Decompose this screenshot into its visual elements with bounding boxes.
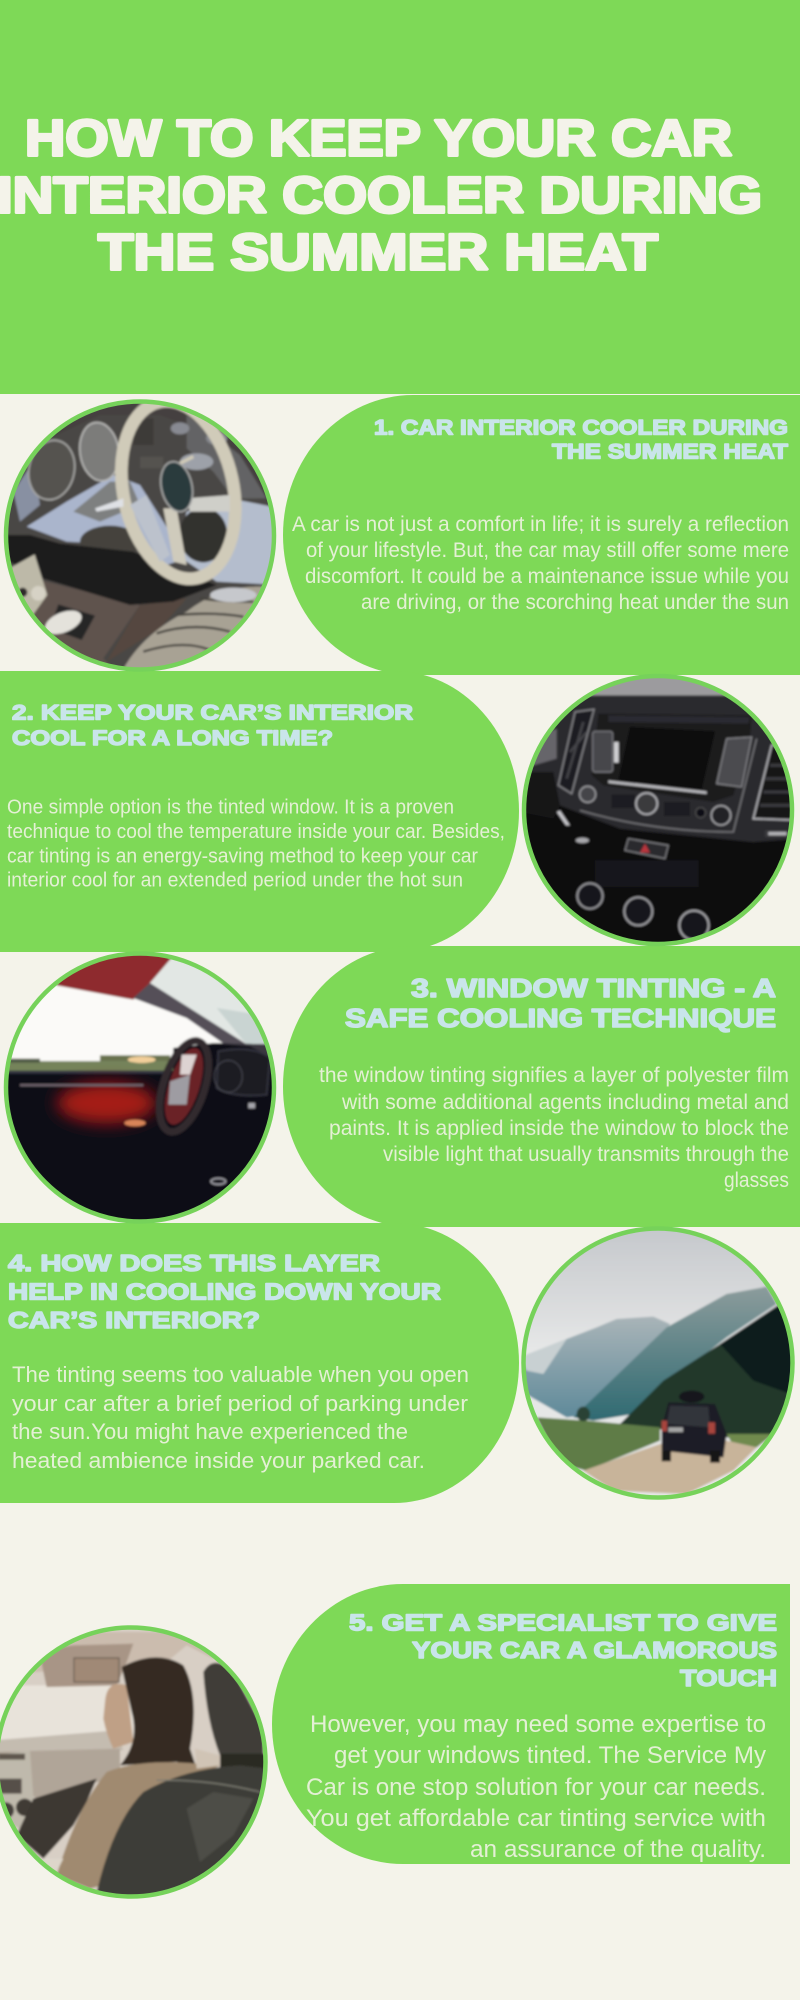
title (0, 110, 762, 280)
body text 3: with some additional agents including metal and (341, 1091, 789, 1114)
panel: section 4 (0, 1223, 519, 1503)
body text 1: of your lifestyle. But, the car may still offer some mere (306, 539, 789, 562)
body text 4: the sun.You might have experienced the (12, 1419, 408, 1444)
photo ring 4 (524, 1228, 792, 1498)
header band (0, 0, 800, 394)
panel: section 5 (272, 1584, 790, 1864)
title: THE SUMMER HEAT (98, 224, 658, 280)
heading 5: 5. GET A SPECIALIST TO GIVE (349, 1610, 777, 1636)
heading 3 (345, 975, 776, 1033)
heading 4 (8, 1250, 441, 1333)
body text 2: car tinting is an energy-saving method to keep your car (7, 846, 478, 868)
panel: section 3 (283, 946, 800, 1227)
title: INTERIOR COOLER DURING (0, 166, 762, 224)
body text 5 (306, 1711, 766, 1863)
body text 1: are driving, or the scorching heat under the sun (361, 591, 789, 614)
body text 4: The tinting seems too valuable when you open (12, 1362, 469, 1387)
heading 5: YOUR CAR A GLAMOROUS (412, 1637, 777, 1663)
photo ring 1 (6, 402, 274, 670)
body text 3: visible light that usually transmits through the (383, 1143, 789, 1166)
heading 2: COOL FOR A LONG TIME? (12, 726, 333, 750)
body text 4: your car after a brief period of parking under (12, 1391, 469, 1416)
heading 3: 3. WINDOW TINTING - A (411, 975, 776, 1003)
heading 5 (349, 1610, 777, 1691)
photo ring 2 (524, 676, 792, 944)
panel shape 1 (283, 395, 800, 675)
body text 3: glasses (724, 1169, 789, 1192)
panel shape 5 (272, 1584, 790, 1864)
body text 5: You get affordable car tinting service with (306, 1805, 766, 1832)
body text 2: interior cool for an extended period under the hot sun (7, 870, 463, 892)
body text 4: heated ambience inside your parked car. (12, 1448, 425, 1473)
body text 3 (319, 1064, 789, 1192)
body text 1 (292, 513, 789, 614)
body text 1: A car is not just a comfort in life; it is surely a reflection (292, 513, 789, 536)
heading 2 (12, 700, 414, 750)
photo 3: car interior at sunset (8, 956, 272, 1220)
body text 2 (7, 796, 505, 892)
heading 5: TOUCH (680, 1665, 777, 1691)
heading 4: CAR’S INTERIOR? (8, 1307, 260, 1333)
body text 4 (12, 1362, 469, 1473)
panel shape 4 (0, 1223, 519, 1503)
body text 5: get your windows tinted. The Service My (334, 1742, 766, 1769)
photo ring 5 (0, 1628, 266, 1896)
panel shape 2 (0, 671, 519, 952)
photo 5: woman smiling in passenger seat (0, 1630, 264, 1894)
heading 1: 1. CAR INTERIOR COOLER DURING (374, 416, 788, 440)
photo 1: classic car dashboard and steering wheel (8, 404, 272, 668)
body text 5: However, you may need some expertise to (310, 1711, 766, 1738)
photo ring 3 (6, 954, 274, 1222)
body text 2: One simple option is the tinted window. It is a proven (7, 796, 454, 818)
title: HOW TO KEEP YOUR CAR (25, 110, 732, 166)
heading 4: HELP IN COOLING DOWN YOUR (8, 1278, 441, 1304)
panel: section 1 (283, 395, 800, 675)
photo 4: SUV on mountain road (526, 1230, 790, 1495)
body text 5: an assurance of the quality. (470, 1836, 766, 1863)
body text 1: discomfort. It could be a maintenance issue while you (305, 565, 789, 588)
body text 3: paints. It is applied inside the window to block the (329, 1117, 789, 1140)
photo 2: car infotainment console (526, 678, 790, 942)
body text 2: technique to cool the temperature inside your car. Besides, (7, 821, 505, 843)
heading 2: 2. KEEP YOUR CAR’S INTERIOR (12, 700, 414, 724)
panel shape 3 (283, 946, 800, 1227)
panel: section 2 (0, 671, 519, 952)
body text 5: Car is one stop solution for your car needs. (306, 1774, 766, 1801)
heading 1 (374, 416, 788, 464)
heading 3: SAFE COOLING TECHNIQUE (345, 1005, 776, 1033)
heading 1: THE SUMMER HEAT (552, 440, 788, 464)
heading 4: 4. HOW DOES THIS LAYER (8, 1250, 380, 1276)
body text 3: the window tinting signifies a layer of polyester film (319, 1064, 789, 1087)
